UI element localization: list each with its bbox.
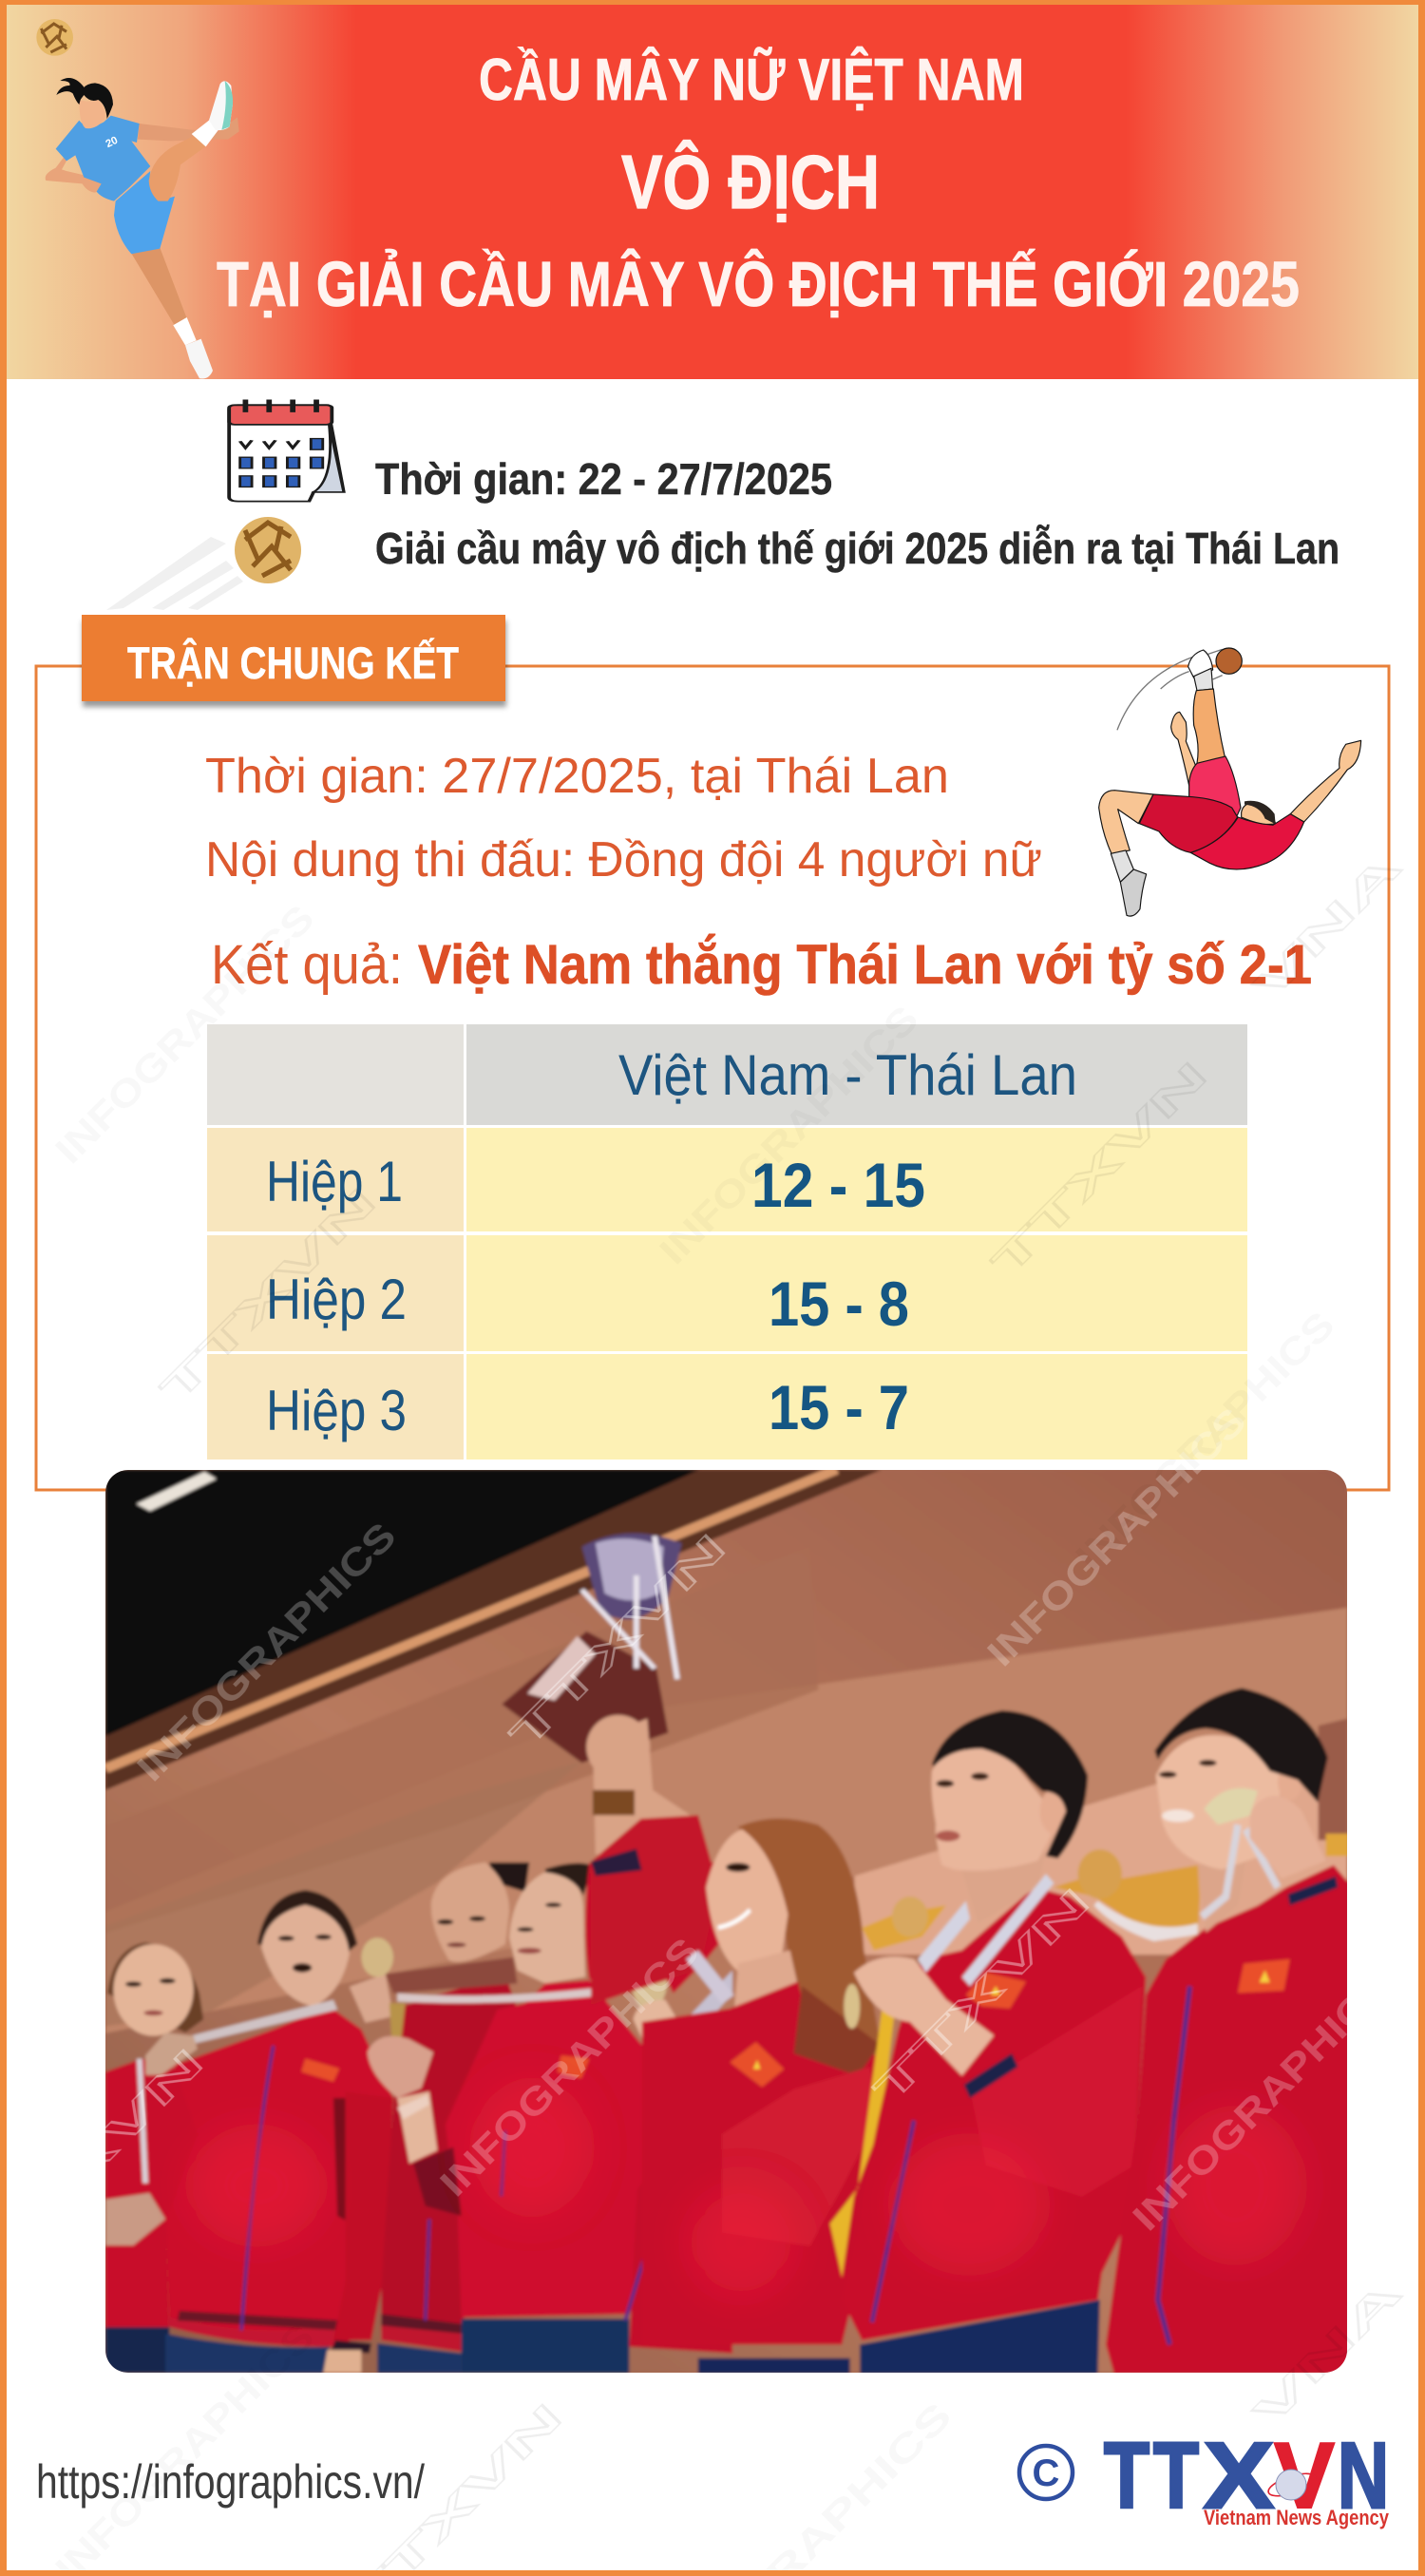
- watermarks: INFOGRAPHICS: [1068, 1304, 1342, 1578]
- facial features: [125, 1902, 561, 2015]
- photo: Vietnamese team lifting the trophy: [105, 1470, 1349, 2374]
- illustration: bicycle kick player in red: [1099, 648, 1361, 916]
- watermarks: INFOGRAPHICS: [979, 1400, 1254, 1674]
- ribbons and medals: [386, 1957, 518, 1994]
- logo: TTXVN Vietnam News Agency: N: [1338, 2423, 1389, 2528]
- text: result: Việt Nam thắng Thái Lan với tỷ số 2-1: [418, 934, 1312, 996]
- info row: tournament location: [106, 517, 1340, 610]
- logo: TTXVN Vietnam News Agency: V: [1274, 2423, 1335, 2528]
- icon: calendar: [229, 400, 344, 502]
- watermarks: INFOGRAPHICS: [48, 897, 322, 1172]
- title line 1: CẦU MÂY NỮ VIỆT NAM: [479, 48, 1024, 113]
- watermarks: INFOGRAPHICS: [1125, 1964, 1399, 2239]
- icon: copyright mark: [1019, 2446, 1073, 2499]
- person 4: [509, 1869, 585, 1983]
- person 2: [257, 1890, 357, 1954]
- row: set 3: 15 - 7: [769, 1372, 909, 1442]
- illustration: kicking player in blue with ball: 20: [104, 135, 120, 150]
- team members left group: [105, 1862, 732, 2373]
- watermarks: VNA: [1246, 846, 1410, 1009]
- footer url: https://infographics.vn/: [36, 2455, 425, 2509]
- watermarks: VNA: [1246, 2272, 1410, 2435]
- person 5: [738, 1819, 882, 2062]
- text: competition event: Nội dung thi đấu: Đồng đội 4 người nữ: [205, 832, 1042, 887]
- info row: tournament dates: [229, 400, 832, 504]
- team members right group: [642, 1689, 1349, 2374]
- row: set 3: [266, 1372, 909, 1442]
- person 3: [489, 1862, 529, 1892]
- logo: TTXVN Vietnam News Agency: T: [1104, 2423, 1150, 2528]
- icon: globe with orbit: [1265, 2469, 1319, 2501]
- icon: copyright mark: C: [1033, 2452, 1059, 2494]
- yellow fabric: [830, 2009, 894, 2278]
- person 7: [1106, 1865, 1349, 2374]
- fabric highlights: [190, 2081, 1302, 2299]
- heading badge: final match: [82, 615, 505, 701]
- panel: final match: [36, 615, 1389, 1490]
- logo: TTXVN Vietnam News Agency: [1019, 2423, 1390, 2529]
- watermarks: [0, 846, 1410, 2576]
- row: set 2: 15 - 8: [769, 1269, 909, 1339]
- row: set 3: Hiệp 3: [266, 1379, 407, 1442]
- icon: flying rattan ball: [106, 517, 301, 610]
- center woman lower jacket: [627, 2189, 733, 2355]
- heading badge: final match: TRẬN CHUNG KẾT: [127, 638, 459, 688]
- logo: TTXVN Vietnam News Agency: T: [1153, 2423, 1199, 2528]
- header banner: [0, 0, 1425, 379]
- watermarks: TTXVN: [153, 1180, 384, 1411]
- text: time: Thời gian: 22 - 27/7/2025: [375, 454, 832, 504]
- text: match time: Thời gian: 27/7/2025, tại Thái Lan: [205, 749, 949, 804]
- icon: header rattan ball: [36, 19, 73, 56]
- watermarks: INFOGRAPHICS: [652, 998, 926, 1272]
- row: set 2: Hiệp 2: [266, 1268, 407, 1331]
- watermarks: TTXVN: [866, 1880, 1097, 2111]
- person 6: [842, 1887, 1146, 2340]
- illustration: kicking player in blue with ball: [36, 19, 239, 379]
- watermarks: TTXVN: [503, 1526, 733, 1757]
- watermarks: INFOGRAPHICS: [129, 1515, 404, 1789]
- text: result: Kết quả:: [211, 934, 403, 996]
- watermarks: INFOGRAPHICS: [432, 1930, 707, 2204]
- text: agency name: Vietnam News Agency: [1204, 2506, 1390, 2529]
- logo: TTXVN Vietnam News Agency: X: [1204, 2423, 1274, 2528]
- table header: Việt Nam - Thái Lan: [618, 1043, 1077, 1107]
- decorations: [1054, 1865, 1200, 1937]
- row: set 2: [266, 1268, 909, 1339]
- hall background: [105, 1470, 1347, 2373]
- watermarks: TTXVN: [984, 1054, 1215, 1285]
- row: set 1: Hiệp 1: [266, 1150, 403, 1213]
- trophy and raised arm: [502, 1534, 718, 2005]
- person 1: [107, 1942, 203, 2032]
- table: set scores: [207, 1024, 1247, 1460]
- title line 2: VÔ ĐỊCH: [621, 140, 880, 224]
- raised sleeve lower part: [585, 1862, 732, 1994]
- row: set 1: [266, 1150, 925, 1220]
- row: set 1: 12 - 15: [751, 1150, 925, 1220]
